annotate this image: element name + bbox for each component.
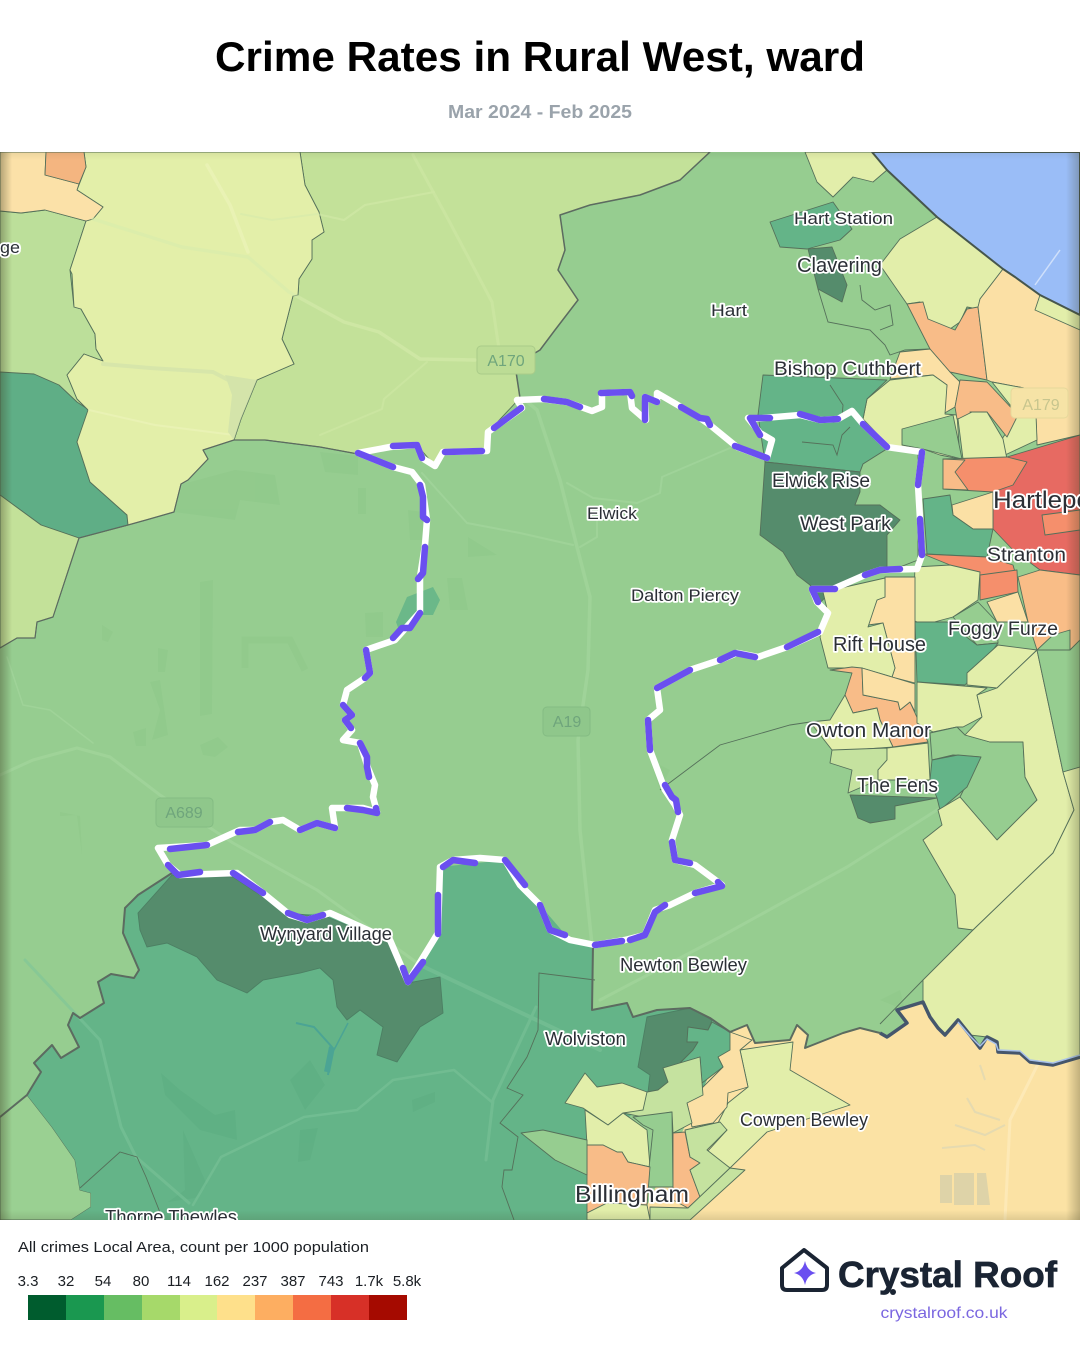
small pond patch (396, 587, 440, 633)
legend values: 32 (58, 1273, 74, 1290)
place labels: Billingham (575, 1181, 689, 1207)
legend title: All crimes Local Area, count per 1000 population (18, 1239, 369, 1256)
ward boundary: purple dashes (168, 392, 922, 982)
southern beige estuary area (640, 1002, 1080, 1220)
ward boundary: white base (158, 392, 922, 982)
place labels: Hart (711, 301, 747, 320)
road label A19: A19 (553, 714, 581, 731)
place labels: Owton Manor (806, 720, 931, 742)
River Tees (880, 1002, 1080, 1065)
edge vignette (0, 152, 1080, 1220)
outer borough boundary (0, 152, 880, 1117)
road label A689: A689 (165, 805, 203, 822)
bottom left corner area (0, 1095, 91, 1220)
road label A179: A179 (1022, 397, 1060, 414)
place labels: Bishop Cuthbert (774, 359, 922, 380)
thin district boundaries (80, 285, 930, 1220)
brand name: Crystal Roof (838, 1254, 1058, 1295)
north-east districts (758, 152, 1080, 688)
title: Crime Rates in Rural West, ward (215, 33, 865, 80)
legend values: 114 (167, 1273, 191, 1290)
legend values: 5.8k (393, 1273, 422, 1290)
legend colour scale (28, 1295, 407, 1320)
faint farmland patches in main green (60, 452, 905, 1010)
place labels: Elwick Rise (772, 471, 870, 492)
place labels: Dalton Piercy (631, 586, 740, 605)
mid green terrain texture (161, 1060, 435, 1202)
road label A179 (1011, 388, 1068, 418)
legend values: 3.3 (18, 1273, 38, 1290)
road label A689 (156, 798, 213, 827)
north-west road and river tracks (89, 155, 499, 440)
place labels: West Park (800, 514, 892, 535)
road label A19 (543, 707, 590, 736)
legend values: 54 (95, 1273, 111, 1290)
choropleth map (0, 152, 1080, 1220)
place labels: Stranton (987, 545, 1066, 566)
place labels: Clavering (797, 255, 882, 277)
legend values: 743 (318, 1273, 344, 1290)
farm track arch (245, 640, 305, 670)
road label A170: A170 (487, 353, 525, 370)
subtitle: date range: Mar 2024 - Feb 2025 (448, 102, 632, 122)
terrain roads (0, 400, 937, 1205)
legend (18, 1239, 422, 1320)
road label A170 (477, 346, 535, 374)
Billingham and Cowpen districts (521, 1022, 850, 1220)
legend values: 387 (280, 1273, 306, 1290)
legend values: 1.7k (355, 1273, 384, 1290)
place labels: The Fens (857, 775, 938, 797)
place labels: Hart Station (794, 209, 893, 228)
dark green low-crime areas (138, 875, 712, 1092)
estuary ground details (940, 1060, 1040, 1220)
brand logo (780, 1248, 1058, 1322)
place labels: ge (0, 238, 20, 257)
Wynyard south and Wolviston mid green area (27, 860, 730, 1220)
place labels: Rift House (833, 634, 926, 656)
sea (872, 152, 1080, 315)
brand URL: crystalroof.co.uk (880, 1305, 1009, 1322)
lake and streams (296, 1023, 348, 1075)
pier line (1035, 250, 1060, 285)
south-east districts (810, 640, 1080, 1065)
place labels (0, 209, 1080, 1227)
legend values: 80 (133, 1273, 149, 1290)
place labels: Foggy Furze (948, 619, 1058, 640)
place labels: Wolviston (545, 1029, 626, 1049)
place labels: Cowpen Bewley (740, 1110, 868, 1130)
place labels: Elwick (587, 504, 638, 523)
place labels: Newton Bewley (620, 955, 747, 975)
west and north rural areas (0, 152, 710, 648)
place labels: Wynyard Village (260, 924, 392, 944)
legend values: 162 (204, 1273, 230, 1290)
icon: house with star (782, 1250, 827, 1290)
legend values (18, 1273, 422, 1290)
legend values: 237 (242, 1273, 268, 1290)
